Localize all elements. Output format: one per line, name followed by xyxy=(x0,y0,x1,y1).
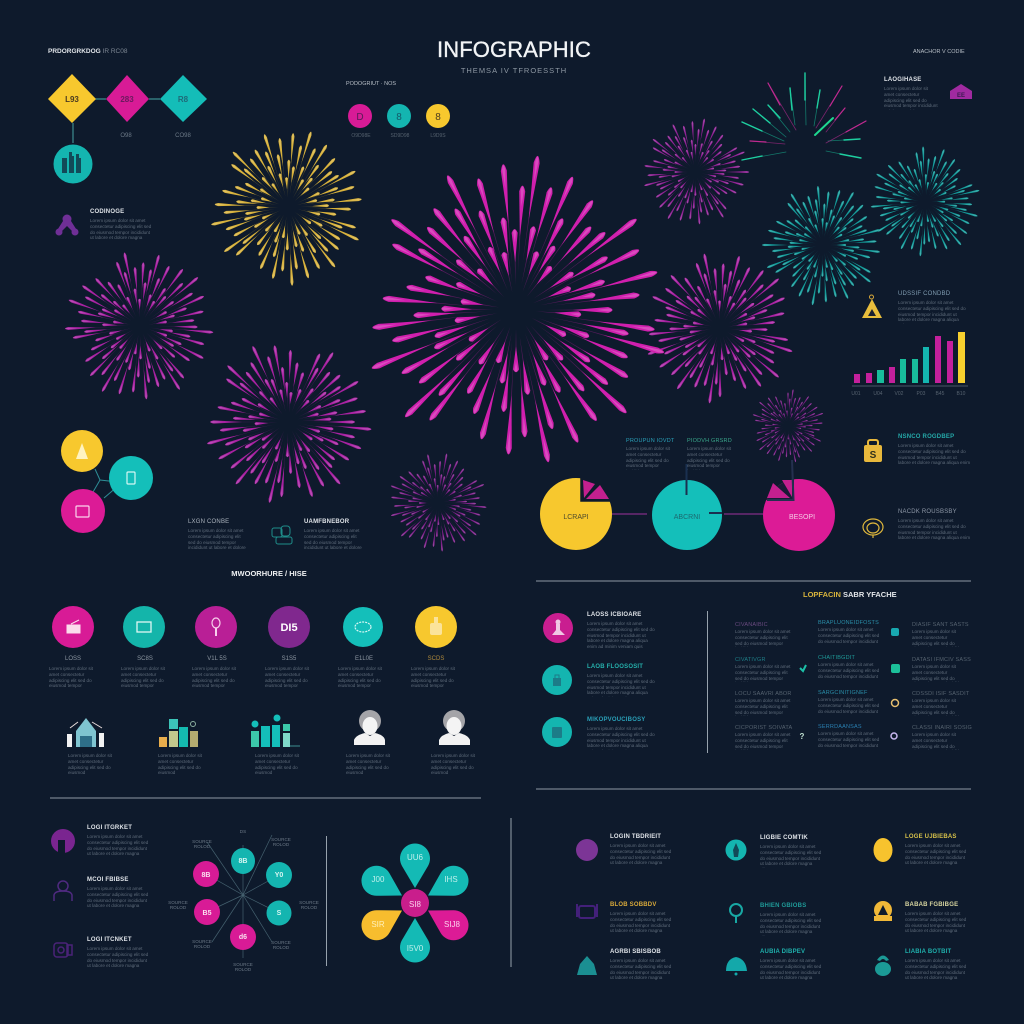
text: spiral note: NACDK ROUSBSBY xyxy=(898,509,957,515)
teal kettle xyxy=(875,956,891,976)
text: pie note one: PROUPUN IOVDT xyxy=(626,438,674,444)
magenta diamond xyxy=(106,75,149,122)
subtitle: THEMSA IV TFROESSTH xyxy=(461,66,567,75)
radial node diagram: SOURCE xyxy=(271,940,291,945)
firework: lower magenta burst xyxy=(190,324,383,514)
node upper left: 8B xyxy=(202,872,210,879)
firework: top purple burst xyxy=(619,94,775,250)
text: grid row 3 col 3: Lorem ipsum dolor sit amet consectetur adipiscing elit sed do eiusmod tempor incididunt ut labore et dolore magna xyxy=(905,958,966,980)
text: lock note: NSNCO ROGDBEP xyxy=(898,434,954,440)
top icon row: three small circles: 8 xyxy=(396,112,402,123)
text: grid row 2 col 3: BABAB FGBIBGE xyxy=(905,902,958,908)
text: chart note: UDSSIF CONDBD xyxy=(898,291,950,297)
row b col 1: CIVATIVGR xyxy=(735,657,766,663)
yellow diamond xyxy=(48,74,96,123)
circle row captions: E1L0E xyxy=(355,656,373,662)
text: grid row 3 col 1: Lorem ipsum dolor sit amet consectetur adipiscing elit sed do eiusmod tempor incididunt ut labore et dolore magna xyxy=(610,958,671,980)
bar chart: U01 xyxy=(851,391,861,397)
yellow hat xyxy=(874,901,892,921)
text: grid row 3 col 3: LIABIA BOTBIT xyxy=(905,949,951,955)
text: logi itcnket: Lorem ipsum dolor sit amet consectetur adipiscing elit sed do eiusmod tempor incididunt ut labore et dolore magna xyxy=(87,946,148,968)
circle: purple label xyxy=(268,606,310,648)
node lower left: B5 xyxy=(203,910,212,917)
firework: small purple burst over pie xyxy=(736,375,838,476)
node lower right: S xyxy=(277,910,282,917)
column 6: Lorem ipsum dolor sit amet consectetur adipiscing elit sed do eiusmod tempor xyxy=(411,666,455,688)
top icon row: three small circles: L9D9S xyxy=(430,133,446,139)
radial node diagram: DS xyxy=(240,829,246,834)
text: uamfbnebor: UAMFBNEBOR xyxy=(304,519,349,525)
text: grid row 1 col 1: Lorem ipsum dolor sit amet consectetur adipiscing elit sed do eiusmod tempor incididunt ut labore et dolore magna xyxy=(610,843,671,865)
text: pie note one xyxy=(626,438,674,470)
icon: purple house xyxy=(950,84,972,99)
icon: purple outline person xyxy=(54,881,72,901)
flower diagram: UU6 xyxy=(407,853,424,862)
row c col 3: CDSSDI ISIF SASDIT xyxy=(912,691,969,697)
flower diagram: SIR xyxy=(371,920,385,929)
bar chart: B10 xyxy=(957,391,966,397)
teal house xyxy=(577,956,597,975)
title: INFOGRAPHIC xyxy=(437,37,591,62)
firework: left magenta burst xyxy=(25,212,250,438)
top icon row: three small circles: O9D98E xyxy=(351,133,371,139)
radial node diagram xyxy=(168,829,319,972)
icon: yellow lock weight: S xyxy=(870,450,877,461)
column 3: Lorem ipsum dolor sit amet consectetur adipiscing elit sed do eiusmod tempor xyxy=(192,666,236,688)
magenta diamond: 283 xyxy=(120,95,134,104)
firework: main magenta burst xyxy=(327,125,695,499)
circle row captions: S1S5 xyxy=(282,656,297,662)
teal figure circle xyxy=(726,840,746,860)
row b col 3: DATASI IFMCIV SASS xyxy=(912,657,971,663)
circle: yellow bottle xyxy=(415,606,457,648)
circle: magenta toolbox xyxy=(52,606,94,648)
magenta pie: BESOPI xyxy=(789,514,815,521)
flower diagram: SI8 xyxy=(409,900,422,909)
text: grid row 3 col 1: AGRBI SBISBOB xyxy=(610,949,661,955)
row d col 2: SERRDAANSAS xyxy=(818,724,862,730)
text: grid row 1 col 1: LOGIN TBDRIEIT xyxy=(610,834,661,840)
magenta pie xyxy=(763,460,835,551)
text: grid row 2 col 2: BHIEN GBIOBS xyxy=(760,903,806,909)
diagram: three diamonds flow xyxy=(48,74,207,184)
column 1: Lorem ipsum dolor sit amet consectetur adipiscing elit sed do eiusmod tempor xyxy=(49,666,93,688)
text: grid row 3 col 3 xyxy=(905,949,970,981)
row a col 2: BRAPLUONEIDFOSTS xyxy=(818,620,879,626)
row d col 2 xyxy=(818,724,879,748)
teal diamond: R8 xyxy=(178,95,189,104)
text: lxgn conbe: LXGN CONBE xyxy=(188,519,229,525)
radial node diagram: ROLOD xyxy=(194,944,211,949)
dark purple frame xyxy=(577,904,597,918)
icon: purple figure xyxy=(56,214,78,236)
circle: purple label: DI5 xyxy=(280,622,298,634)
text: logi itcnket: LOGI ITCNKET xyxy=(87,937,132,943)
column 4: Lorem ipsum dolor sit amet consectetur adipiscing elit sed do eiusmod tempor xyxy=(265,666,309,688)
note 1: Lorem ipsum dolor sit amet consectetur adipiscing elit sed do eiusmod xyxy=(68,753,112,775)
radial node diagram: SOURCE xyxy=(233,962,253,967)
row a col 1: CIVANAIBIC xyxy=(735,622,768,628)
text: logi itgrket: LOGI ITGRKET xyxy=(87,825,132,831)
text row under pictograms xyxy=(68,753,475,775)
radial node diagram: ROLOD xyxy=(170,905,187,910)
magenta node xyxy=(61,489,105,533)
top icon row: three small circles: SD9D98 xyxy=(391,133,410,139)
icon circle row xyxy=(52,606,457,648)
teal pie xyxy=(652,464,722,550)
row d col 1 xyxy=(735,725,792,750)
teal circle xyxy=(542,665,572,695)
icon: purple arch xyxy=(51,829,75,853)
yellow lemon xyxy=(874,838,892,862)
text: grid row 2 col 3: Lorem ipsum dolor sit amet consectetur adipiscing elit sed do eiusmod tempor incididunt ut labore et dolore magna xyxy=(905,911,966,933)
top right heading: ANACHOR V CODIE xyxy=(913,49,965,55)
text: codinoge: CODINOGE xyxy=(90,209,124,215)
row b col 2 xyxy=(818,655,879,679)
column 5: Lorem ipsum dolor sit amet consectetur adipiscing elit sed do eiusmod tempor xyxy=(338,666,382,688)
table icons xyxy=(800,628,900,741)
note 4: Lorem ipsum dolor sit amet consectetur adipiscing elit sed do eiusmod xyxy=(346,753,390,775)
vertical rules xyxy=(326,611,708,967)
table of notes xyxy=(735,620,972,750)
row d col 1: CICPORIST SOIVATA xyxy=(735,725,792,731)
icon: teal outline cluster xyxy=(272,526,292,544)
circle: magenta microphone xyxy=(195,606,237,648)
top icon row: three small circles xyxy=(348,104,450,139)
node upper right: Y0 xyxy=(275,872,283,879)
text: grid row 1 col 3: LOGE UJBIEBAS xyxy=(905,834,957,840)
radial node diagram: ROLOD xyxy=(194,844,211,849)
icon: yellow lock weight xyxy=(864,440,882,462)
text: grid row 3 col 2: AUBIA DIBPEV xyxy=(760,949,805,955)
firework: right magenta burst xyxy=(618,226,826,433)
teal pie: ABCRNI xyxy=(674,514,700,521)
radial node diagram: ROLOD xyxy=(301,905,318,910)
row a col 3: DIASIF SANT SASTS xyxy=(912,622,969,628)
icon: person two xyxy=(439,710,470,745)
circle row captions: SCDS xyxy=(428,656,444,662)
icon: purple house: EE xyxy=(957,93,965,99)
radial node diagram: SOURCE xyxy=(192,939,212,944)
yellow node xyxy=(61,430,103,472)
bar chart: B45 xyxy=(936,391,945,397)
row b col 2: Lorem ipsum dolor sit amet consectetur adipiscing elit sed do eiusmod tempor incididunt xyxy=(818,662,879,679)
text: laogihase xyxy=(884,76,938,110)
text: laoss icbioare: LAOSS ICBIOARE xyxy=(587,612,641,618)
flower diagram: IHS xyxy=(444,875,458,884)
node top: 8B xyxy=(239,858,247,865)
circle row captions: SC8S xyxy=(137,656,153,662)
text: mcoi fbibse: MCOI FBIBSE xyxy=(87,877,129,883)
top icon row: three small circles: D xyxy=(356,112,364,123)
icon: dark purple device xyxy=(54,943,72,957)
circle: teal card xyxy=(123,606,165,648)
node bottom: d6 xyxy=(239,934,247,941)
flower diagram xyxy=(356,844,474,962)
magenta circle xyxy=(543,613,573,643)
row d col 3: CLASSI INAIRI SOSIG xyxy=(912,725,972,731)
row c col 1: LOCU SAAVRI ABOR xyxy=(735,691,792,697)
dividers xyxy=(50,581,971,798)
bar chart: V02 xyxy=(895,391,904,397)
circle row captions: V1L 5S xyxy=(207,656,227,662)
circle row captions: LOSS xyxy=(65,656,81,662)
yellow pie xyxy=(540,478,612,550)
firework: teal burst centre right xyxy=(733,157,909,333)
radial node diagram: ROLOD xyxy=(273,945,290,950)
text: laogihase: LAOGIHASE xyxy=(884,77,921,83)
text: grid row 2 col 1: BLOB SOBBDV xyxy=(610,902,657,908)
text: grid row 2 col 1: Lorem ipsum dolor sit amet consectetur adipiscing elit sed do eiusmod tempor incididunt ut labore et dolore magna xyxy=(610,911,671,933)
text: codinoge: Lorem ipsum dolor sit amet consectetur adipiscing elit sed do eiusmod tempor incididunt ut labore et dolore magna xyxy=(90,218,151,240)
bar chart xyxy=(851,332,968,397)
column 2: Lorem ipsum dolor sit amet consectetur adipiscing elit sed do eiusmod tempor xyxy=(121,666,165,688)
yellow pie: LCRAPI xyxy=(563,514,589,521)
icon: yellow triangle xyxy=(862,295,882,318)
top left heading: PRDORGRKDOG IR RC08 xyxy=(48,48,127,55)
teal circle icon xyxy=(54,144,92,184)
teal circle two xyxy=(542,717,572,747)
note 5: Lorem ipsum dolor sit amet consectetur adipiscing elit sed do eiusmod xyxy=(431,753,475,775)
row b col 2: CHAITIBGDIT xyxy=(818,655,855,661)
row c col 2 xyxy=(818,690,879,714)
radial node diagram: SOURCE xyxy=(192,839,212,844)
row c col 3 xyxy=(912,691,970,716)
icon: house chart xyxy=(67,718,104,747)
bar chart: P03 xyxy=(917,391,926,397)
pie chart trio xyxy=(540,460,835,551)
node cluster: three linked circles xyxy=(61,430,153,533)
section heading: right middle: LOPFACIN SABR YFACHE xyxy=(803,590,897,599)
text row under circles xyxy=(49,666,455,688)
diamond caption 2: CO98 xyxy=(175,133,191,139)
radial node diagram: ROLOD xyxy=(273,842,290,847)
text: lxgn conbe: Lorem ipsum dolor sit amet consectetur adipiscing elit sed do eiusmod tempor incididunt ut labore et dolore xyxy=(188,528,246,550)
row a col 3 xyxy=(912,622,969,647)
flower diagram: J00 xyxy=(372,875,385,884)
text: pie note two: PIODVH GRSRD xyxy=(687,438,732,444)
firework: teal burst far right xyxy=(842,117,1009,284)
note 2: Lorem ipsum dolor sit amet consectetur adipiscing elit sed do eiusmod xyxy=(158,753,202,775)
firework: yellow burst xyxy=(182,103,389,312)
text: grid row 3 col 2: Lorem ipsum dolor sit amet consectetur adipiscing elit sed do eiusmod tempor incididunt ut labore et dolore magna xyxy=(760,958,821,980)
text: mcoi fbibse: Lorem ipsum dolor sit amet consectetur adipiscing elit sed do eiusmod tempor incididunt ut labore et dolore magna xyxy=(87,886,148,908)
text: lock note: Lorem ipsum dolor sit amet consectetur adipiscing elit sed do eiusmod tempor incididunt ut labore et dolore magna aliqua enim xyxy=(898,443,970,465)
radial node diagram: ROLOD xyxy=(235,967,252,972)
radial node diagram: SOURCE xyxy=(168,900,188,905)
icon: person one xyxy=(354,710,385,745)
circle row captions xyxy=(65,656,444,662)
table icons: ? xyxy=(800,732,805,741)
row d col 2: Lorem ipsum dolor sit amet consectetur adipiscing elit sed do eiusmod tempor incididunt xyxy=(818,731,879,748)
circle: teal devices xyxy=(343,607,383,647)
flower diagram: I5V0 xyxy=(407,944,424,953)
text: laob floososit: LAOB FLOOSOSIT xyxy=(587,664,643,670)
left list circles xyxy=(542,613,573,747)
diamond caption: O98 xyxy=(120,133,132,139)
firework: small purple burst bottom xyxy=(364,427,513,576)
bottom icons grid xyxy=(576,838,892,976)
teal node xyxy=(109,456,153,500)
icon: mixed bars xyxy=(159,719,198,747)
note 3: Lorem ipsum dolor sit amet consectetur adipiscing elit sed do eiusmod xyxy=(255,753,299,775)
row a col 2 xyxy=(818,620,879,644)
flower diagram: SIJ8 xyxy=(444,920,461,929)
text: logi itgrket: Lorem ipsum dolor sit amet consectetur adipiscing elit sed do eiusmod tempor incididunt ut labore et dolore magna xyxy=(87,834,148,856)
row a col 2: Lorem ipsum dolor sit amet consectetur adipiscing elit sed do eiusmod tempor incididunt xyxy=(818,627,879,644)
top icon row: three small circles: 8 xyxy=(435,112,441,123)
row c col 2: Lorem ipsum dolor sit amet consectetur adipiscing elit sed do eiusmod tempor incididunt xyxy=(818,697,879,714)
text: grid row 1 col 2: LIGBIE COMTIK xyxy=(760,835,808,841)
section heading: left middle: MWOORHURE / HISE xyxy=(231,569,307,578)
teal diamond xyxy=(160,75,207,122)
row b col 3 xyxy=(912,657,971,682)
purple circle xyxy=(576,839,598,861)
row d col 3 xyxy=(912,725,972,750)
firework: sparse teal and pink star xyxy=(742,73,866,160)
radial node diagram: SOURCE xyxy=(299,900,319,905)
yellow diamond: L93 xyxy=(65,95,79,104)
icon: yellow spiral xyxy=(863,519,883,538)
small icon row heading: PODOGRIUT · NOS xyxy=(346,81,396,87)
teal magnifier xyxy=(730,904,742,923)
text: mikopvoucibosy: MIKOPVOUCIBOSY xyxy=(587,717,645,723)
teal bell xyxy=(726,957,747,976)
radial node diagram: SOURCE xyxy=(271,837,291,842)
row c col 2: SARGCINITIGNEF xyxy=(818,690,868,696)
text: grid row 1 col 3: Lorem ipsum dolor sit amet consectetur adipiscing elit sed do eiusmod tempor incididunt ut labore et dolore magna xyxy=(905,843,966,865)
icon: teal bars xyxy=(251,714,300,747)
text: uamfbnebor: Lorem ipsum dolor sit amet consectetur adipiscing elit sed do eiusmod tempor incididunt ut labore et dolore xyxy=(304,528,362,550)
text: spiral note: Lorem ipsum dolor sit amet consectetur adipiscing elit sed do eiusmod tempor incididunt ut labore et dolore magna aliqua enim xyxy=(898,518,970,540)
bar chart: U04 xyxy=(873,391,883,397)
